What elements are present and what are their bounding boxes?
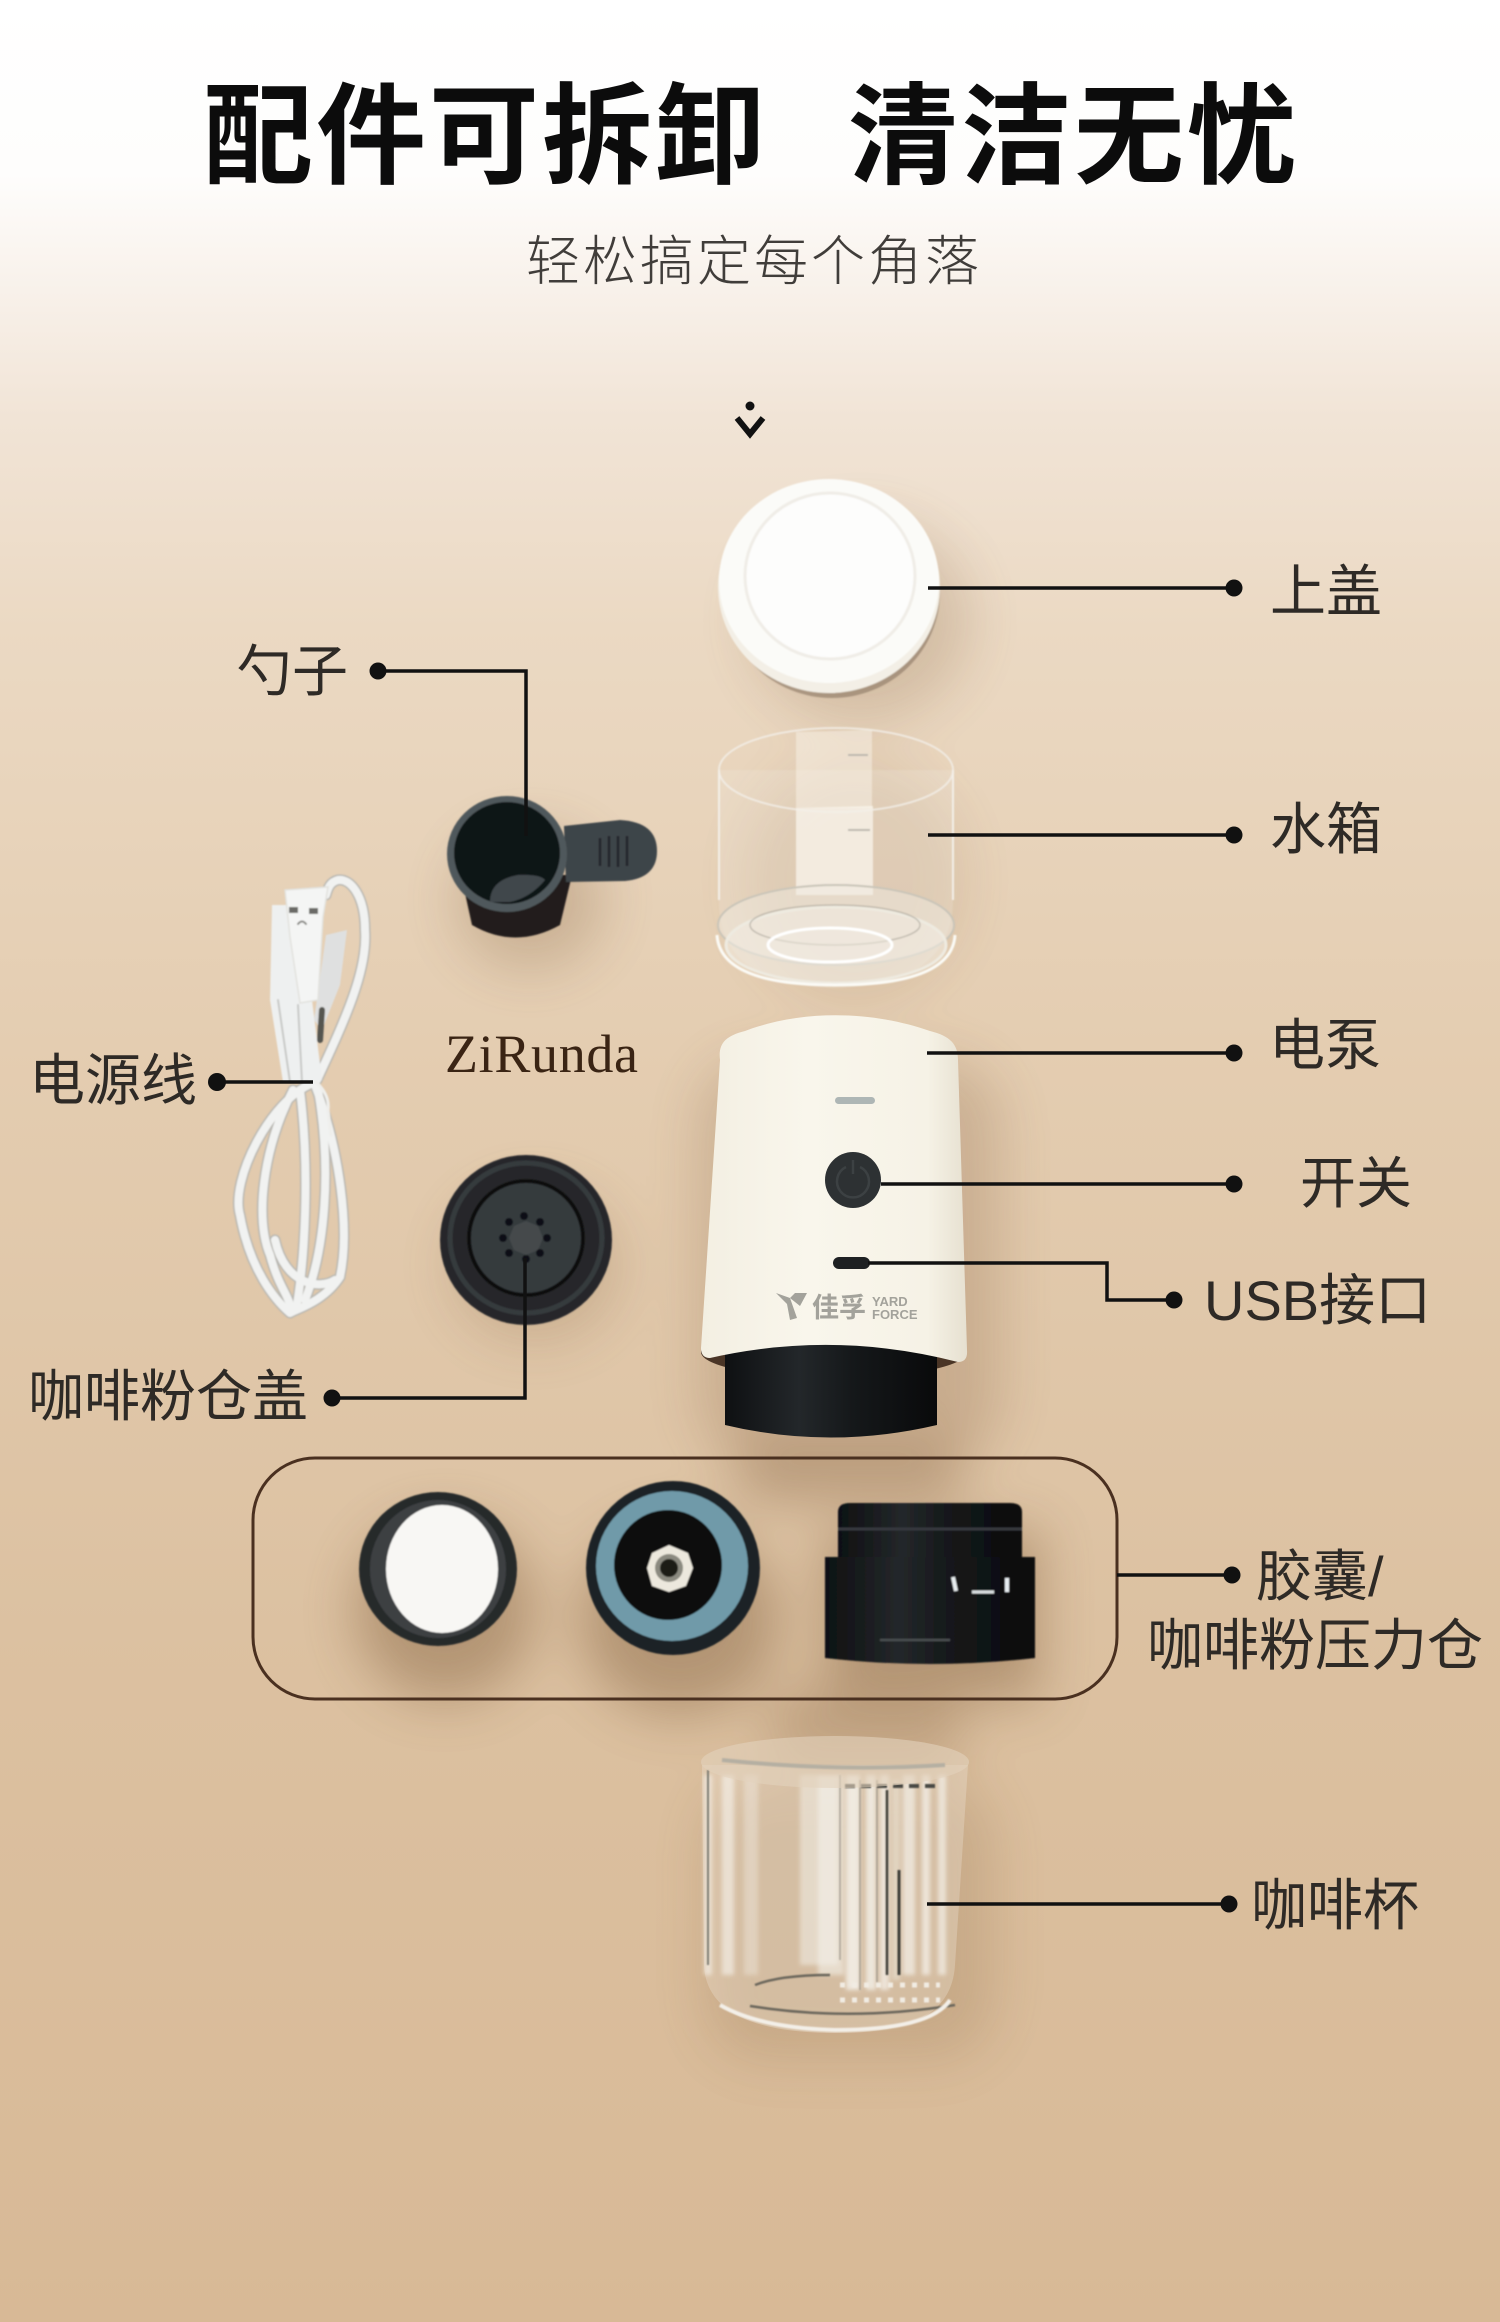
callout: capsule and pressure chamber: 胶囊/	[1256, 1545, 1384, 1608]
callout: spoon	[236, 640, 526, 836]
part: measuring spoon	[447, 796, 657, 938]
icon: down chevron	[737, 402, 763, 434]
part: capsule cap	[359, 1492, 517, 1646]
callout: switch: 开关	[1300, 1152, 1412, 1215]
title: 配件可拆卸	[203, 76, 768, 199]
pump brand logo: YARD	[872, 1294, 908, 1309]
watermark: ZiRunda	[445, 1024, 638, 1084]
pump brand logo: 佳孚	[812, 1293, 866, 1323]
pump USB port	[833, 1257, 870, 1269]
callout: power cable	[29, 1049, 313, 1112]
part: ribbed coffee cup	[701, 1736, 969, 2033]
soft product shadows	[355, 520, 1040, 2060]
pump power button	[825, 1152, 881, 1208]
subtitle: 轻松搞定每个角落	[526, 232, 982, 292]
callout: powder chamber lid	[28, 1258, 525, 1428]
part: pump unit	[701, 1015, 967, 1438]
callout: USB port	[868, 1263, 1431, 1332]
callout: coffee cup: 咖啡杯	[1251, 1874, 1419, 1937]
title: 清洁无忧	[848, 76, 1300, 199]
part: coffee powder chamber lid	[440, 1155, 612, 1325]
capsule group frame	[253, 1458, 1117, 1699]
callout: USB port: USB接口	[1204, 1269, 1431, 1332]
callout: powder chamber lid: 咖啡粉仓盖	[28, 1365, 308, 1428]
pump brand logo	[776, 1293, 918, 1323]
callout: lid: 上盖	[1270, 560, 1382, 623]
title	[203, 76, 1300, 199]
part: top lid	[718, 479, 940, 698]
callout: pump	[927, 1014, 1381, 1077]
callout: water tank	[928, 798, 1382, 861]
pump indicator light	[835, 1097, 875, 1104]
part: USB power cable	[238, 880, 365, 1313]
part: water tank	[717, 728, 955, 988]
part: powder pressure chamber	[825, 1503, 1035, 1664]
callout: capsule and pressure chamber	[1117, 1545, 1483, 1677]
callout: pump: 电泵	[1269, 1014, 1381, 1077]
callout: capsule and pressure chamber: 咖啡粉压力仓	[1147, 1614, 1483, 1677]
callout: coffee cup	[927, 1874, 1419, 1937]
callout: lid	[928, 560, 1382, 623]
callout: water tank: 水箱	[1270, 798, 1382, 861]
pump brand logo: FORCE	[872, 1307, 918, 1322]
callout: switch	[881, 1152, 1412, 1215]
callout: power cable: 电源线	[29, 1049, 197, 1112]
part: pressure seal disc	[586, 1481, 760, 1655]
callout: spoon: 勺子	[236, 640, 348, 703]
